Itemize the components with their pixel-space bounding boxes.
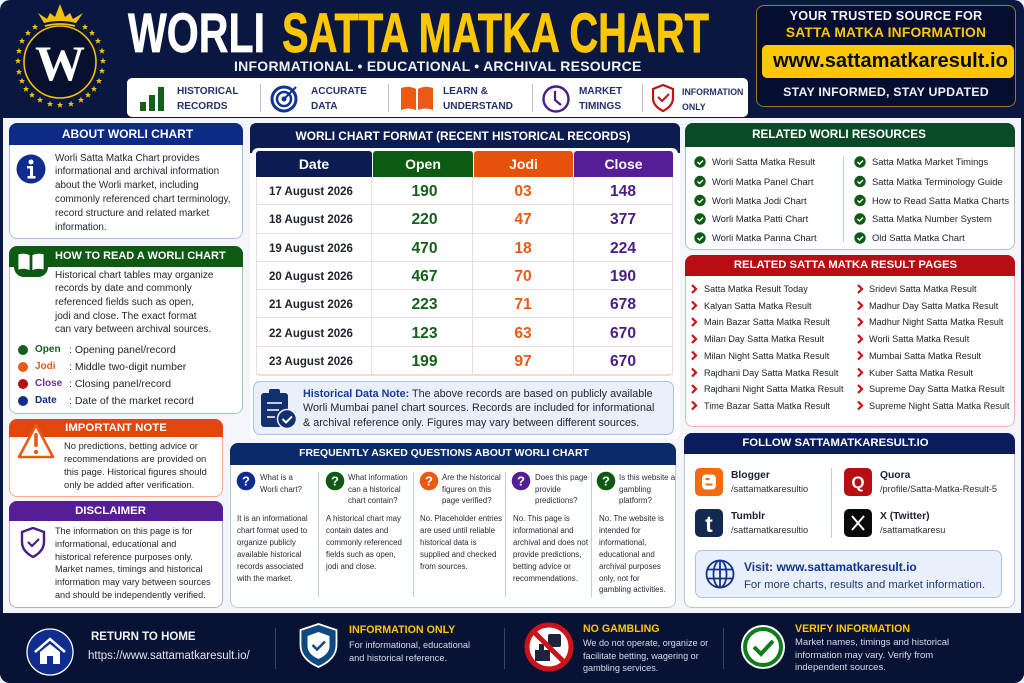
social: x: X (Twitter) (880, 511, 930, 522)
answer: intended for (599, 526, 641, 535)
how to read text: Historical chart tables may organize (55, 270, 213, 280)
no gambling text: gambling services. (583, 663, 658, 673)
result links right: Worli Satta Matka Result (869, 334, 969, 344)
main content background (3, 118, 1021, 613)
row: 22 August: 63 (514, 324, 532, 342)
icon: question (596, 471, 616, 491)
about text (55, 152, 230, 233)
feature: accurate data (270, 86, 367, 112)
answer: No. The website is (599, 514, 664, 523)
answer: educational and (599, 550, 655, 559)
faq 1 (236, 472, 308, 583)
about text: commonly referenced chart terminology, (55, 194, 230, 205)
icon: info (16, 154, 46, 184)
source box (756, 5, 1016, 107)
result links left: Satta Matka Result Today (704, 284, 808, 294)
verify text: Market names, timings and historical (795, 637, 949, 648)
disclaimer text: informational, educational and (55, 539, 176, 549)
answer: betting advice or (513, 562, 571, 571)
row: 22 August (257, 319, 672, 347)
social: tumblr: t (705, 511, 713, 537)
row: 18 August: 47 (514, 211, 532, 228)
panel: how to read (9, 246, 243, 414)
question (535, 472, 588, 507)
source tagline: STAY INFORMED, STAY UPDATED (783, 85, 989, 99)
important note heading (9, 419, 223, 437)
answer: only, not for (599, 574, 640, 583)
disclaimer text: historical reference purposes only. (55, 552, 193, 562)
result pages heading: RELATED SATTA MATKA RESULT PAGES (734, 259, 957, 271)
answer (326, 514, 402, 571)
row: 17 August: 190 (411, 183, 438, 200)
feature: market timings: MARKET (579, 86, 622, 97)
result links left: Main Bazar Satta Matka Result (704, 317, 830, 327)
answer: commonly referenced (326, 538, 402, 547)
question: Is this website a (619, 473, 675, 482)
icon: question (236, 472, 256, 490)
logo (15, 4, 106, 108)
disclaimer text: information may vary between sources (55, 577, 211, 587)
answer: records associated (237, 562, 303, 571)
answer: gambling activities. (599, 585, 666, 594)
about heading: ABOUT WORLI CHART (62, 127, 193, 141)
home url: https://www.sattamatkaresult.io/ (88, 650, 250, 662)
feature: accurate data: ACCURATE (311, 86, 367, 97)
row: 19 August: 19 August 2026 (269, 243, 353, 255)
visit box (695, 550, 1002, 598)
question: Does this page (535, 473, 588, 482)
answer: It is an informational (237, 514, 308, 523)
answer: No. Placeholder entries (420, 514, 502, 523)
answer: archival and does not (513, 538, 588, 547)
result links left (690, 282, 850, 418)
icon: question (420, 472, 438, 490)
icon: warning (18, 424, 54, 458)
icon: home (26, 627, 74, 677)
answer: provide predictions, (513, 550, 581, 559)
feature: information only: INFORMATION (682, 87, 743, 97)
verify title: VERIFY INFORMATION (795, 623, 910, 635)
result links left: Time Bazar Satta Matka Result (704, 400, 830, 410)
footer (0, 614, 1024, 683)
resources links left: Worli Matka Panna Chart (712, 232, 817, 243)
question: platform? (619, 496, 652, 505)
answer: chart format used to (237, 526, 307, 535)
faq 2 (326, 472, 408, 571)
subtitle: INFORMATIONAL • EDUCATIONAL • ARCHIVAL RESOURCE (234, 58, 642, 74)
about text: Worli Satta Matka Chart provides (55, 152, 200, 164)
panel: related result pages (685, 255, 1015, 427)
information only text: and historical reference. (349, 652, 447, 662)
important note text: recommendations are provided on (64, 453, 206, 464)
follow heading (684, 433, 1015, 454)
website pill (762, 45, 1014, 78)
feature: historical records (140, 86, 238, 112)
result links left: Milan Day Satta Matka Result (704, 334, 824, 344)
panel: about (9, 123, 243, 239)
social: tumblr: Tumblr (731, 511, 765, 522)
legend: jodi: : Middle two-digit number (69, 361, 186, 373)
important note heading: IMPORTANT NOTE (65, 422, 167, 434)
row: 22 August: 22 August 2026 (269, 328, 353, 340)
row: 17 August: 17 August 2026 (269, 186, 353, 198)
answer: from sources. (420, 562, 468, 571)
row: 21 August: 223 (411, 296, 438, 313)
row: 23 August: 23 August 2026 (269, 356, 353, 368)
header (15, 1, 1016, 117)
icon: shield (20, 527, 46, 558)
feature: learn and understand: UNDERSTAND (443, 100, 513, 112)
question: What is a (260, 473, 293, 482)
icon: clipboard (261, 389, 296, 428)
visit subtext: For more charts, results and market information. (744, 579, 985, 591)
row: 17 August: 148 (610, 183, 636, 200)
divider (642, 84, 643, 112)
icon: question: ? (425, 474, 433, 488)
feature: historical records: RECORDS (177, 100, 227, 112)
row: 20 August (257, 262, 672, 290)
row: 19 August: 18 (514, 240, 532, 257)
icon: verify (740, 624, 786, 670)
question: gambling (619, 485, 651, 494)
question: What information (348, 473, 408, 482)
social: tumblr (695, 509, 820, 538)
resources links right: Satta Matka Terminology Guide (872, 176, 1003, 186)
answer: supplied and checked (420, 550, 496, 559)
legend: open: Open (35, 344, 61, 355)
resources links right: How to Read Satta Matka Charts (872, 194, 1009, 206)
question: Are the historical (442, 473, 501, 482)
result links left: Kalyan Satta Matka Result (704, 300, 812, 310)
answer (237, 514, 308, 583)
row: 20 August: 190 (610, 268, 636, 285)
answer: recommendations. (513, 574, 578, 583)
icon: question: ? (602, 474, 610, 488)
website pill: www.sattamatkaresult.io (773, 50, 1008, 72)
panel: follow (684, 433, 1015, 608)
row: 20 August: 20 August 2026 (269, 271, 353, 283)
faq heading: FREQUENTLY ASKED QUESTIONS ABOUT WORLI CHART (299, 448, 589, 459)
question: figures on this (442, 485, 491, 494)
disclaimer heading (9, 501, 223, 521)
table header: Open (405, 156, 441, 172)
row: 21 August: 71 (514, 296, 532, 313)
icon: question: ? (242, 474, 250, 488)
disclaimer text: and should be independently verified. (55, 590, 206, 600)
answer: jodi and close. (326, 562, 376, 571)
panel: related worli resources (685, 123, 1015, 250)
social: quora: Quora (880, 470, 910, 481)
result links left: Milan Night Satta Matka Result (704, 350, 829, 360)
disclaimer text (55, 526, 211, 600)
faq 3 (420, 472, 502, 571)
about text: information. (55, 222, 107, 233)
feature bar (127, 78, 748, 117)
feature: market timings: TIMINGS (579, 100, 621, 112)
legend: close: : Closing panel/record (69, 378, 171, 390)
row: 20 August: 70 (514, 268, 532, 285)
faq heading (230, 443, 676, 465)
answer (599, 513, 666, 596)
row: 18 August (257, 205, 672, 234)
question: can a historical (348, 485, 401, 494)
answer: informational and (513, 526, 574, 535)
feature: learn and understand: LEARN & (443, 86, 488, 97)
social: blogger: /sattamatkaresultio (731, 484, 808, 494)
no gambling text: facilitate betting, wagering or (583, 650, 699, 660)
row: 18 August: 377 (610, 211, 636, 228)
social: blogger: Blogger (731, 470, 770, 481)
resources heading: RELATED WORLI RESOURCES (752, 128, 926, 141)
panel: chart format (250, 123, 680, 439)
feature: information only: ONLY (682, 102, 706, 112)
answer: available historical (237, 550, 301, 559)
social: blogger (695, 468, 820, 497)
social: quora: /profile/Satta-Matka-Result-5 (880, 484, 997, 494)
icon: book tab (14, 251, 48, 277)
result links right: Madhur Day Satta Matka Result (869, 300, 998, 310)
row: 20 August: 467 (411, 268, 438, 285)
important note text (64, 440, 207, 490)
result links right: Sridevi Satta Matka Result (869, 284, 977, 294)
about text: record structure and related market (55, 208, 209, 219)
how to read heading (9, 246, 243, 267)
icon: no gambling (524, 622, 574, 672)
source heading: YOUR TRUSTED SOURCE FOR (790, 9, 982, 23)
how to read text: can vary between archival sources. (55, 324, 211, 335)
chart heading: WORLI CHART FORMAT (RECENT HISTORICAL RECORDS) (296, 129, 630, 143)
faq 4 (513, 472, 591, 602)
result links left: Rajdhani Night Satta Matka Result (704, 384, 843, 394)
how to read text (54, 270, 213, 335)
icon: question: ? (517, 474, 525, 488)
resources links left: Worli Satta Matka Result (712, 156, 815, 167)
social: x (844, 509, 1009, 538)
table header (256, 151, 673, 177)
result links right (856, 282, 1016, 418)
feature: historical records: HISTORICAL (177, 86, 238, 97)
note text (303, 388, 654, 429)
about heading (9, 123, 243, 145)
resources links left: Worli Matka Patti Chart (712, 213, 808, 224)
resources links left: Worli Matka Panel Chart (712, 176, 813, 186)
row: 21 August (257, 290, 672, 318)
disclaimer text: Market names, timings and historical (55, 564, 203, 574)
important note text: this page. Historical figures should (64, 466, 207, 477)
no gambling text: We do not operate, organize or (583, 638, 708, 648)
social: quora (844, 468, 1009, 497)
divider (260, 84, 261, 112)
question (619, 472, 675, 507)
question (442, 473, 501, 505)
panel: important note (9, 419, 223, 497)
answer: with the market. (237, 574, 293, 583)
verify text (795, 637, 949, 674)
answer: historical data is (420, 538, 477, 547)
how to read text: records by date and commonly (55, 283, 192, 294)
result links right: Kuber Satta Matka Result (869, 368, 973, 378)
answer: contain dates and (326, 526, 388, 535)
no gambling text (583, 637, 708, 674)
result links right: Supreme Night Satta Matka Result (869, 400, 1010, 410)
result links right: Madhur Night Satta Matka Result (869, 317, 1003, 327)
return to home: RETURN TO HOME (91, 631, 196, 643)
no gambling title: NO GAMBLING (583, 623, 660, 635)
resources links right: Old Satta Matka Chart (872, 232, 965, 243)
question: provide (535, 485, 561, 494)
historical data note (253, 381, 674, 435)
information only text (349, 639, 470, 664)
table header: Date (299, 156, 329, 172)
result links right: Supreme Day Satta Matka Result (869, 384, 1004, 394)
disclaimer heading: DISCLAIMER (75, 505, 146, 517)
row: 19 August: 470 (411, 240, 438, 257)
table header: Close (604, 156, 643, 172)
row: 18 August: 220 (411, 211, 438, 228)
how to read text: referenced fields such as open, (55, 297, 194, 308)
resources links left (694, 155, 844, 245)
answer: are used until reliable (420, 526, 495, 535)
table (256, 151, 673, 376)
row: 17 August (257, 177, 672, 205)
icon: question (326, 472, 344, 490)
social: x: /sattamatkaresu (880, 525, 945, 535)
question: chart contain? (348, 496, 398, 505)
answer: A historical chart may (326, 514, 401, 523)
resources links right (854, 155, 1014, 245)
result links right: Mumbai Satta Matka Result (869, 350, 981, 360)
result pages heading (685, 255, 1015, 276)
row: 23 August: 199 (411, 353, 438, 370)
icon: globe (705, 559, 735, 589)
source subheading: SATTA MATKA INFORMATION (786, 25, 986, 40)
table header: Jodi (509, 156, 538, 172)
legend: open: : Opening panel/record (69, 344, 176, 356)
answer: archival purposes (599, 562, 661, 571)
panel: disclaimer (9, 501, 223, 608)
row: 19 August (257, 234, 672, 262)
how to read text: jodi and close. The exact format (55, 311, 197, 322)
resources heading (685, 123, 1015, 147)
resources links right: Satta Matka Number System (872, 213, 992, 224)
row: 21 August: 21 August 2026 (269, 299, 353, 311)
legend: close: Close (35, 378, 62, 389)
visit text: Visit: www.sattamatkaresult.io (744, 560, 917, 574)
answer: informational, (599, 538, 646, 547)
panel: faq (230, 443, 676, 608)
row: 23 August: 670 (610, 353, 636, 370)
answer (420, 513, 502, 573)
divider (532, 84, 533, 112)
answer (513, 513, 588, 584)
answer: organize publicly (237, 538, 296, 547)
legend: jodi: Jodi (35, 361, 56, 372)
icon: question: ? (331, 474, 339, 488)
question (348, 473, 408, 505)
result links left: Rajdhani Day Satta Matka Result (704, 368, 838, 378)
legend: date: Date (35, 395, 57, 406)
icon: shield (299, 623, 338, 669)
about text: about the Worli market, including (55, 180, 199, 191)
legend: date: : Date of the market record (69, 395, 194, 407)
disclaimer text: The information on this page is for (55, 526, 192, 536)
chart heading (250, 123, 680, 153)
information only text: For informational, educational (349, 640, 470, 650)
question: page verified? (442, 496, 492, 505)
about text: informational and archival information (55, 166, 219, 177)
follow heading: FOLLOW SATTAMATKARESULT.IO (742, 437, 929, 449)
legend: open (18, 344, 176, 356)
question (260, 473, 302, 494)
divider (388, 84, 389, 112)
row: 18 August: 18 August 2026 (269, 214, 353, 226)
verify text: information may vary. Verify from (795, 650, 933, 660)
legend: close (18, 378, 171, 390)
note text: & archival reference only. Figures may vary between different sources. (303, 417, 639, 429)
answer: No. This page is (513, 514, 570, 523)
resources links left: Worli Matka Jodi Chart (712, 194, 807, 206)
legend: jodi (18, 361, 186, 373)
chart inner sheet (252, 148, 678, 378)
resources links right: Satta Matka Market Timings (872, 156, 988, 167)
row: 22 August: 670 (610, 324, 636, 342)
row: 19 August: 224 (610, 240, 636, 257)
row: 23 August: 97 (514, 353, 532, 370)
verify text: independent sources. (795, 662, 886, 673)
feature: accurate data: DATA (311, 100, 338, 112)
row: 22 August: 123 (411, 324, 438, 342)
how to read heading: HOW TO READ A WORLI CHART (55, 250, 226, 262)
important note text: No predictions, betting advice or (64, 440, 198, 451)
social: tumblr: /sattamatkaresultio (731, 525, 808, 535)
information only title: INFORMATION ONLY (349, 624, 455, 636)
faq 5 (597, 472, 675, 602)
answer: fields such as open, (326, 550, 396, 559)
row: 23 August (256, 347, 673, 375)
important note text: only be added after verification. (64, 479, 194, 490)
feature: learn and understand (401, 86, 513, 112)
row: 21 August: 678 (610, 296, 636, 313)
note text: Worli Mumbai panel chart sources. Records are included for informational (303, 402, 654, 414)
note text: Historical Data Note: The above records are based on publicly available (303, 388, 653, 400)
feature: information only (652, 84, 743, 112)
feature: market timings (542, 85, 622, 113)
question: predictions? (535, 496, 578, 505)
icon: question (511, 471, 531, 491)
row: 17 August: 03 (514, 183, 532, 200)
logo: W (35, 35, 85, 91)
social: quora: Q (851, 473, 865, 492)
question: Worli chart? (260, 485, 302, 494)
